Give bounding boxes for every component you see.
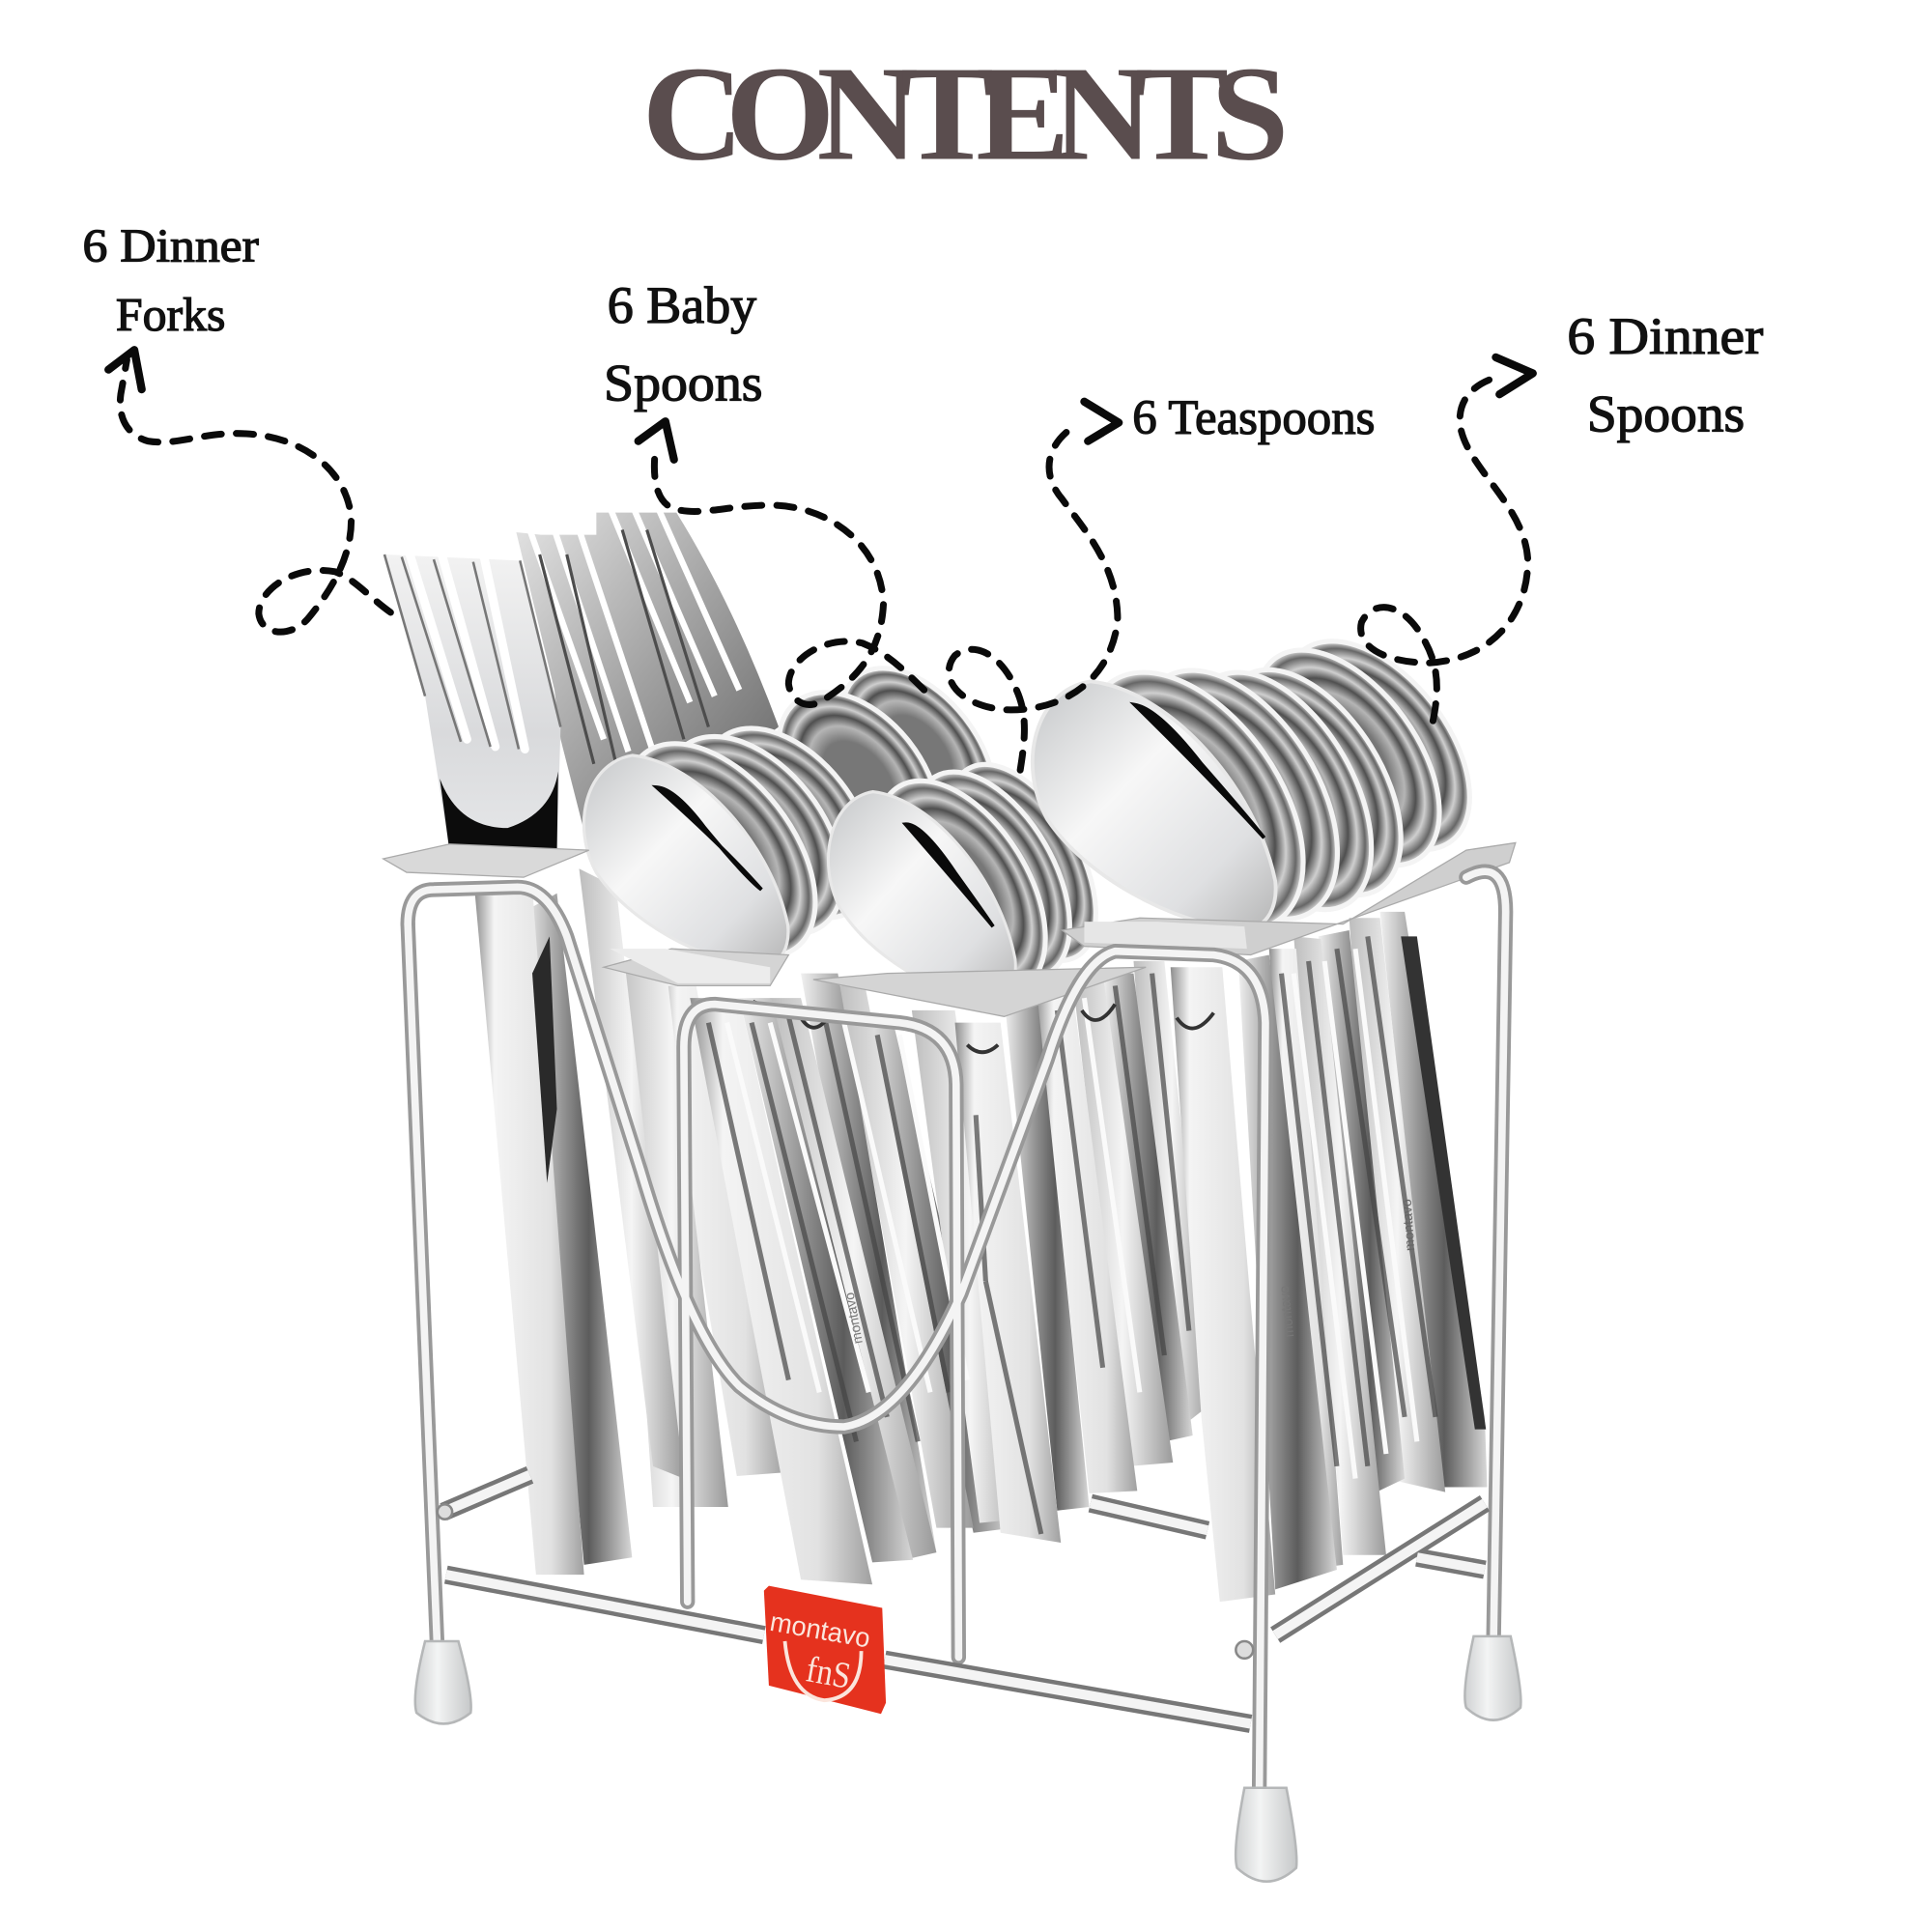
label: 6 Dinner Spoons: 6 Dinner [1567, 307, 1763, 365]
label: 6 Dinner Forks: Forks [116, 290, 225, 341]
label: 6 Baby Spoons: 6 Baby [608, 276, 756, 334]
brand tag: montavo [768, 1606, 872, 1654]
label: 6 Teaspoons: 6 Teaspoons [1132, 391, 1375, 445]
label: 6 Dinner Forks: 6 Dinner [82, 220, 259, 271]
cutlery handles: montavo [841, 1292, 866, 1346]
back forks [516, 508, 779, 850]
baby spoon front bowl [583, 755, 788, 967]
cutlery handles: montavo [1399, 1199, 1417, 1252]
neck shadows [743, 1001, 1213, 1052]
rack plates [384, 842, 1516, 1016]
front fork [384, 552, 560, 853]
label: 6 Dinner Forks [82, 220, 259, 341]
wire rack frame [408, 871, 1506, 1794]
teaspoons stack [842, 740, 1126, 1023]
brand tag [764, 1586, 886, 1714]
label: 6 Dinner Spoons: Spoons [1587, 384, 1745, 442]
dashed arrow: teaspoons [949, 402, 1119, 770]
brand tag: fnS [803, 1649, 854, 1697]
cutlery handles: montavo [1276, 1285, 1296, 1338]
baby spoons stack [588, 640, 1025, 991]
teaspoon front bowl [828, 792, 1015, 1001]
dinner spoons stack [1043, 608, 1506, 968]
dashed arrow: forks [108, 350, 390, 632]
label: 6 Dinner Spoons [1567, 307, 1763, 442]
label: 6 Baby Spoons [604, 276, 763, 412]
label: 6 Baby Spoons: Spoons [604, 355, 763, 412]
title: CONTENTS [642, 38, 1289, 188]
dashed arrow: dinner spoons [1361, 357, 1533, 721]
dinner spoon front bowl [1033, 681, 1276, 930]
cutlery handles [474, 868, 1488, 1602]
dashed arrow: baby spoons [639, 421, 924, 704]
rack feet [415, 1636, 1520, 1882]
mirror streaks on handles [708, 936, 1435, 1534]
